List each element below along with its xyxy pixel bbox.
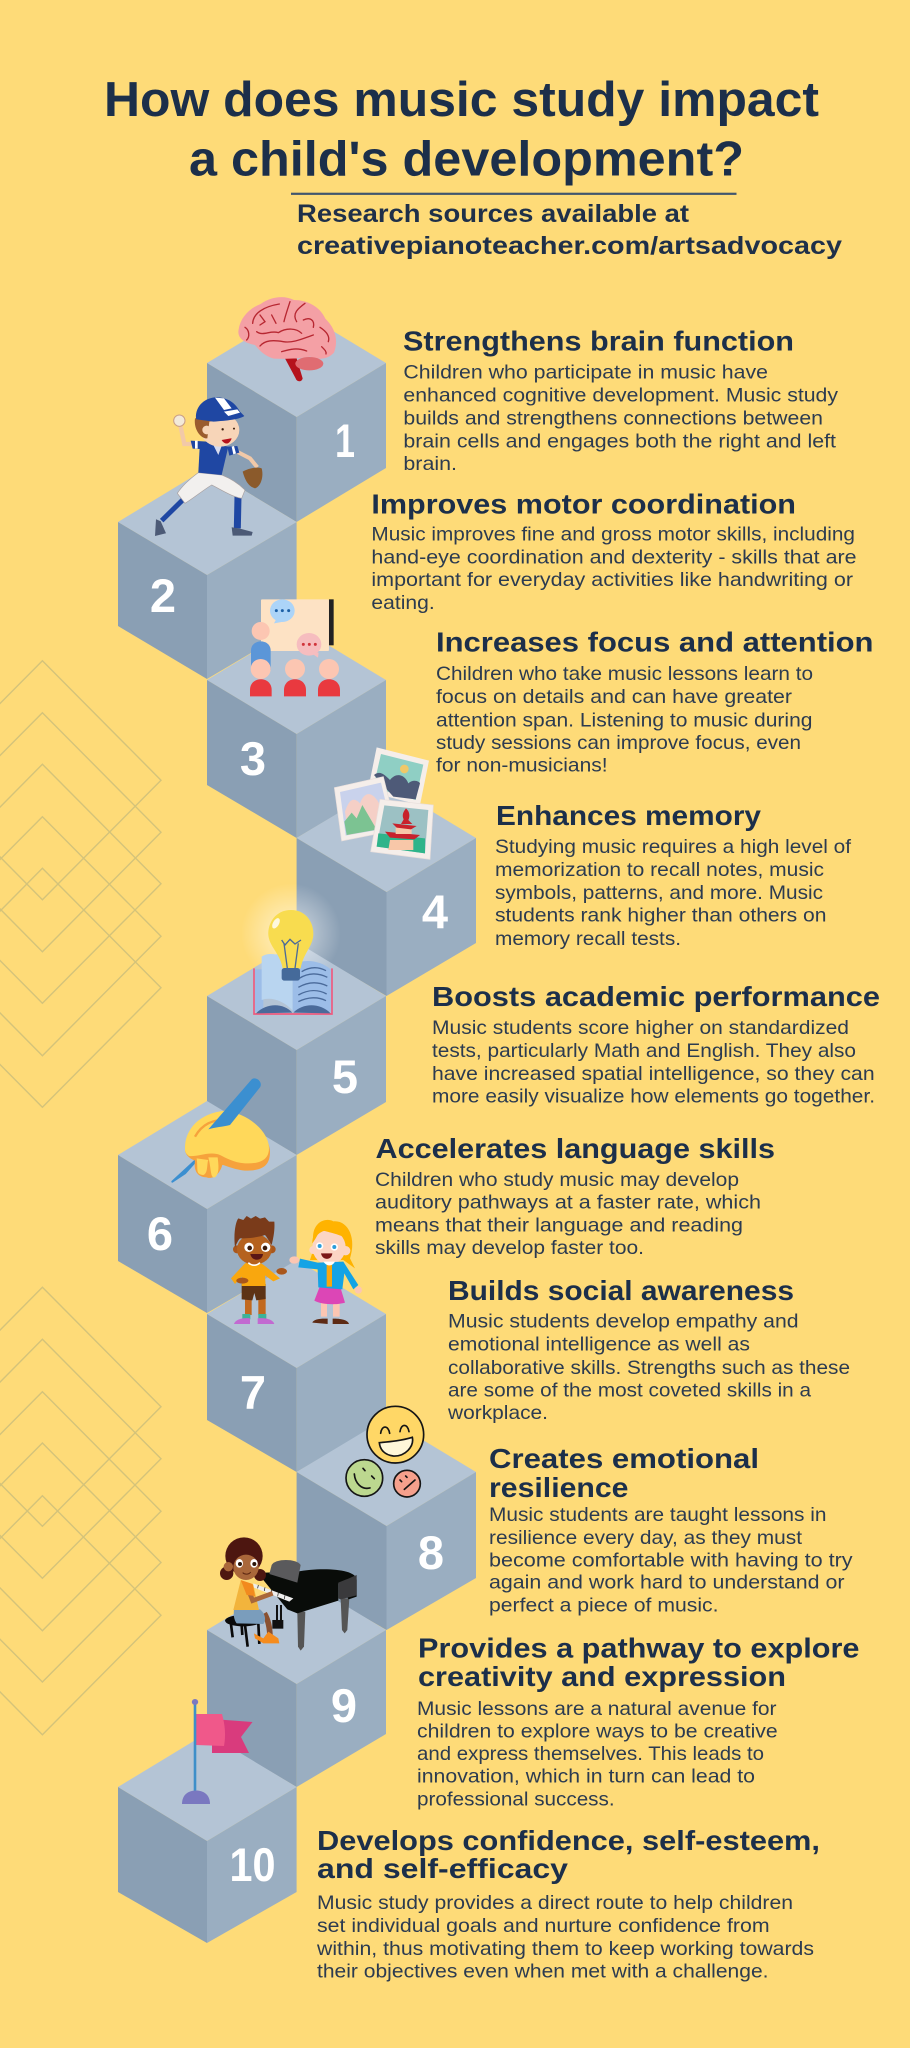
heading: Strengthens brain function [403, 326, 794, 357]
body text [316, 1892, 814, 1983]
body text: Music lessons are a natural avenue for [417, 1698, 777, 1720]
body text: builds and strengthens connections between [403, 407, 823, 429]
heading: Builds social awareness [448, 1275, 794, 1306]
body text: set individual goals and nurture confidence from [317, 1915, 770, 1937]
body text: Music improves fine and gross motor skills, including [371, 524, 855, 546]
title: How does music study impact [104, 73, 819, 127]
body text: memorization to recall notes, music [495, 859, 824, 881]
icon: brain [238, 297, 336, 381]
icon: baseball player [155, 397, 262, 536]
cube 3: 3 [240, 732, 266, 785]
cube 3 [207, 626, 386, 838]
body text: study sessions can improve focus, even [436, 732, 801, 754]
body text [495, 836, 852, 950]
body text: auditory pathways at a faster rate, which [375, 1192, 761, 1214]
cube 5: 5 [332, 1050, 358, 1103]
body text [403, 361, 838, 475]
subtitle: research sources [297, 200, 842, 260]
body text: perfect a piece of music. [489, 1595, 718, 1617]
body text: attention span. Listening to music during [436, 710, 812, 732]
icon: two children [231, 1216, 362, 1324]
body text: hand-eye coordination and dexterity - skills that are [371, 546, 857, 568]
body text: Children who participate in music have [403, 361, 768, 383]
subtitle: research sources: creativepianoteacher.com/artsadvocacy [297, 232, 842, 260]
body text: important for everyday activities like handwriting or [371, 569, 854, 591]
icon: teacher and students [250, 599, 340, 696]
body text [417, 1698, 778, 1811]
body text: brain. [403, 453, 457, 475]
body text: eating. [371, 592, 435, 614]
item 8: emotional resilience [489, 1443, 853, 1617]
body text: students rank higher than others on [495, 905, 826, 927]
cube 6: 6 [147, 1207, 173, 1260]
body text [447, 1311, 850, 1424]
cube 1 [207, 309, 386, 522]
icon: hand writing [172, 1078, 270, 1182]
heading: Accelerates language skills [376, 1133, 775, 1164]
title: a child's development? [189, 133, 744, 187]
item 7: social awareness [447, 1275, 850, 1424]
body text: Studying music requires a high level of [495, 836, 852, 858]
body text: emotional intelligence as well as [448, 1334, 750, 1356]
body text: tests, particularly Math and English. They also [432, 1040, 856, 1062]
cube 9: 9 [331, 1679, 357, 1732]
staircase of numbered cubes [118, 309, 476, 1943]
item 3: focus and attention [436, 627, 874, 777]
body text: become comfortable with having to try [489, 1550, 853, 1572]
icon: stack of photos [334, 747, 433, 859]
cube 9 [207, 1576, 386, 1787]
cube 2 [118, 468, 297, 679]
body text: innovation, which in turn can lead to [417, 1766, 755, 1788]
heading: Boosts academic performance [432, 981, 880, 1012]
heading: Develops confidence, self-esteem, [317, 1825, 820, 1856]
body text [489, 1504, 853, 1617]
cube 7 [207, 1260, 386, 1472]
body text: workplace. [447, 1402, 548, 1424]
body text: Music students are taught lessons in [489, 1504, 826, 1526]
heading: Improves motor coordination [371, 488, 796, 519]
heading: resilience [489, 1472, 628, 1503]
title [104, 73, 819, 187]
body text: means that their language and reading [375, 1215, 743, 1237]
body text: Children who take music lessons learn to [436, 663, 813, 685]
cube 10: 10 [230, 1838, 276, 1891]
body text [371, 524, 857, 614]
heading [489, 1443, 759, 1503]
body text: more easily visualize how elements go together. [432, 1086, 875, 1108]
body text: are some of the most coveted skills in a [448, 1380, 811, 1402]
body text: within, thus motivating them to keep working towards [316, 1938, 814, 1960]
cube 6 [118, 1101, 297, 1313]
body text: professional success. [417, 1789, 615, 1811]
body text: Music students develop empathy and [448, 1311, 799, 1333]
cube 2: 2 [150, 569, 176, 622]
cube 10 [118, 1733, 297, 1943]
body text: and express themselves. This leads to [417, 1743, 764, 1765]
body text: Music study provides a direct route to help children [317, 1892, 793, 1914]
cube 8 [297, 1418, 476, 1630]
icon: smiley faces [346, 1406, 424, 1497]
body text: their objectives even when met with a challenge. [317, 1961, 768, 1983]
subtitle: research sources: Research sources available at [297, 200, 690, 228]
body text: collaborative skills. Strengths such as these [448, 1357, 850, 1379]
body text: Music students score higher on standardized [432, 1017, 849, 1039]
body text: again and work hard to understand or [489, 1572, 845, 1594]
body text [375, 1169, 761, 1259]
body text: brain cells and engages both the right and left [403, 430, 837, 452]
heading [418, 1633, 860, 1692]
item 4: memory [495, 800, 852, 950]
item 6: language skills [375, 1133, 775, 1259]
body text: children to explore ways to be creative [417, 1721, 778, 1743]
item 9: creativity and expression [417, 1633, 860, 1811]
icon: light bulb over open book [241, 883, 341, 1014]
heading: creativity and expression [418, 1661, 786, 1692]
body text: have increased spatial intelligence, so they can [432, 1063, 875, 1085]
heading: Increases focus and attention [436, 627, 874, 658]
cube 7: 7 [240, 1366, 266, 1419]
heading: Creates emotional [489, 1443, 759, 1474]
body text [432, 1017, 875, 1108]
body text [436, 663, 813, 777]
item 5: academic performance [432, 981, 880, 1108]
heading: Enhances memory [496, 800, 761, 831]
heading: Provides a pathway to explore [418, 1633, 860, 1664]
item 1: brain function [403, 326, 838, 475]
body text: memory recall tests. [495, 928, 681, 950]
cube 8: 8 [418, 1526, 444, 1579]
body text: for non-musicians! [436, 755, 608, 777]
body text: skills may develop faster too. [375, 1237, 644, 1259]
body text: enhanced cognitive development. Music study [403, 384, 838, 406]
icon: pink flag [182, 1699, 252, 1804]
heading: and self-efficacy [317, 1853, 568, 1884]
body text: resilience every day, as they must [489, 1527, 803, 1549]
body text: focus on details and can have greater [436, 686, 793, 708]
heading [317, 1825, 820, 1884]
cube 4: 4 [422, 885, 448, 938]
cube 5 [207, 942, 386, 1155]
item 10: confidence and self-efficacy [316, 1825, 820, 1983]
body text: Children who study music may develop [375, 1169, 739, 1191]
item 2: motor coordination [371, 488, 857, 614]
body text: symbols, patterns, and more. Music [495, 882, 823, 904]
icon: child playing piano [220, 1537, 357, 1651]
cube 1: 1 [335, 414, 355, 467]
cube 4 [297, 784, 476, 996]
